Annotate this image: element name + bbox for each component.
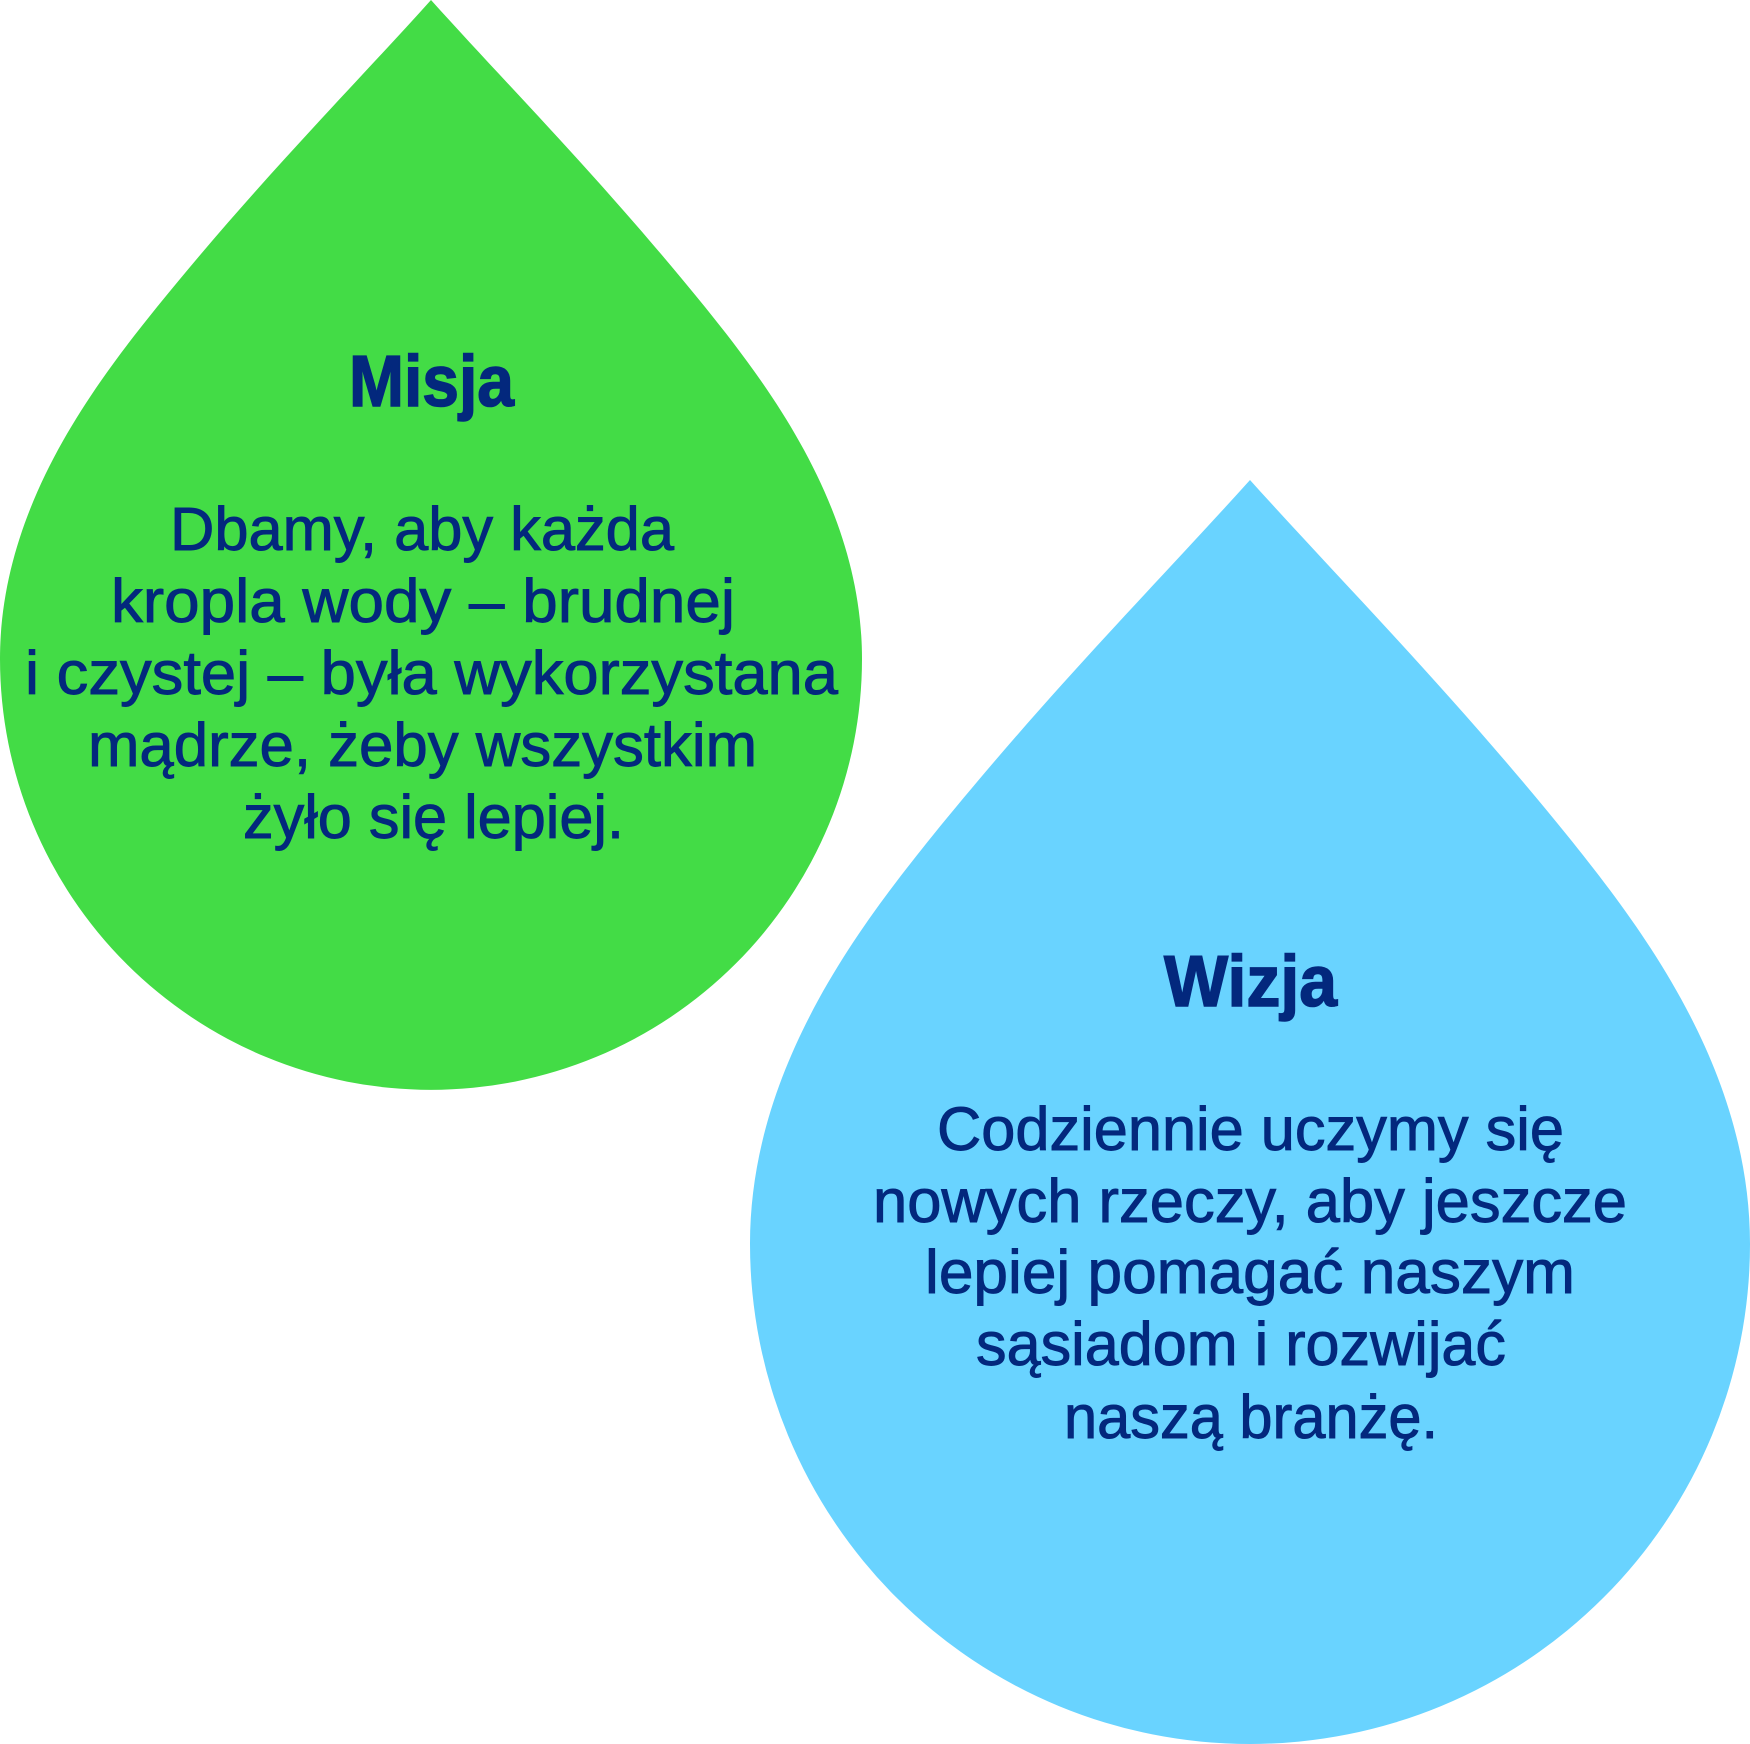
text block: mission statement: Dbamy, aby każda [170,495,674,563]
panel: mission drop [0,0,862,1090]
text block: vision statement: sąsiadom i rozwijać [976,1310,1506,1378]
text block: vision statement: lepiej pomagać naszym [925,1238,1575,1306]
text block: vision statement: nowych rzeczy, aby jeszcze [873,1167,1627,1235]
text block: mission statement: kropla wody – brudnej [111,567,735,635]
text block: vision statement: naszą branżę. [1064,1383,1438,1451]
text block: mission statement: i czystej – była wykorzystana [25,639,838,707]
heading: Misja: Misja [349,342,515,422]
panel: vision drop [750,480,1750,1744]
text block: vision statement [873,1095,1627,1451]
heading: Wizja: Wizja [1164,942,1338,1022]
text block: vision statement: Codziennie uczymy się [937,1095,1564,1163]
icon: green water drop [0,0,862,1090]
text block: mission statement: żyło się lepiej. [243,783,624,851]
icon: blue water drop [750,480,1750,1744]
text block: mission statement [25,495,838,851]
text block: mission statement: mądrze, żeby wszystkim [88,711,757,779]
